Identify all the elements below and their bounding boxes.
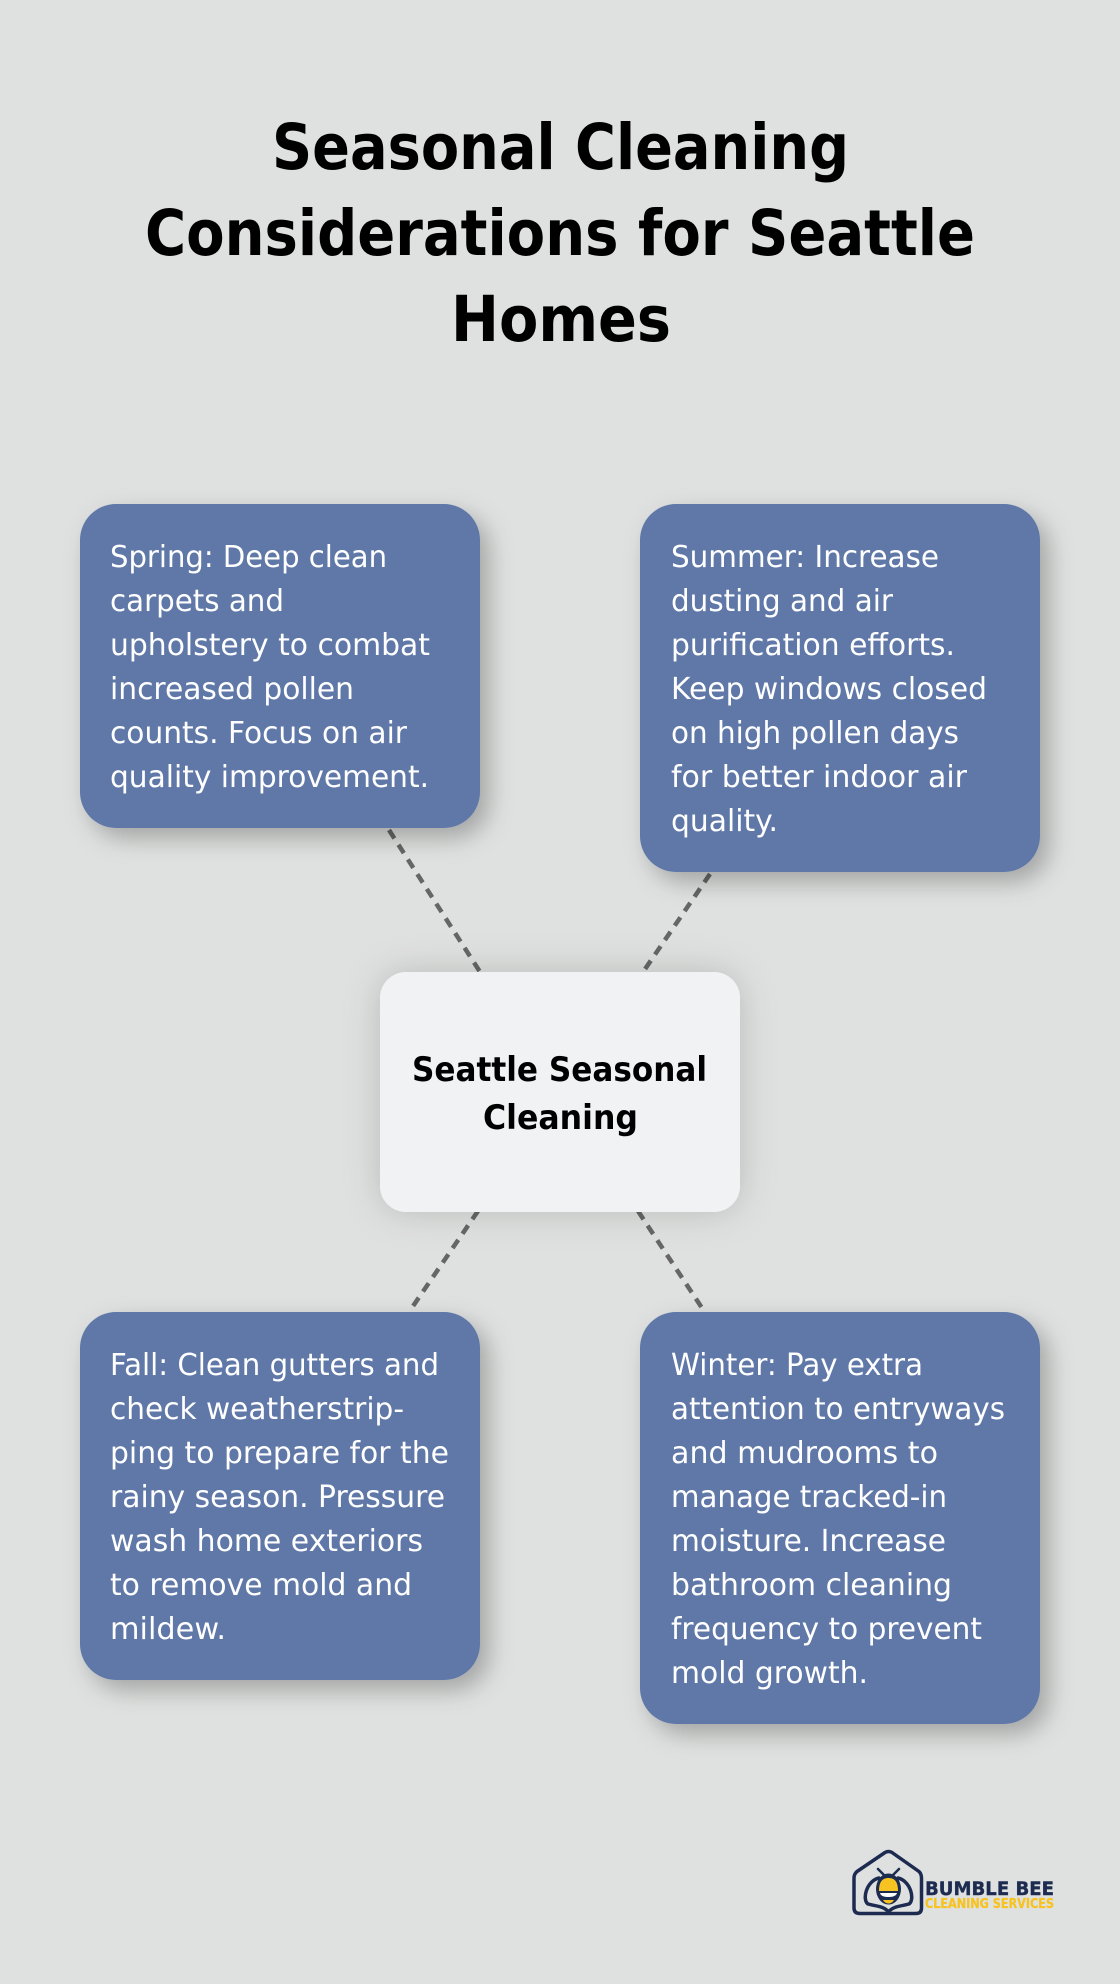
panel: spring: carpets and xyxy=(110,584,284,619)
panel: spring: upholstery to combat xyxy=(110,628,430,663)
panel: winter: Winter: Pay extra xyxy=(671,1348,923,1383)
panel: spring xyxy=(80,504,480,828)
panel: spring: increased pollen xyxy=(110,672,354,707)
title: Considerations for Seattle xyxy=(145,197,975,270)
connector: summer to center xyxy=(641,874,710,975)
panel: winter: mold growth. xyxy=(671,1656,868,1691)
panel: fall: Fall: Clean gutters and xyxy=(110,1348,439,1383)
panel: summer: quality. xyxy=(671,804,778,839)
title: Homes xyxy=(451,283,671,356)
panel: fall xyxy=(80,1312,480,1680)
panel: center hub: Cleaning xyxy=(483,1098,638,1138)
panel: fall: check weatherstrip- xyxy=(110,1392,404,1427)
panel: fall: mildew. xyxy=(110,1612,226,1647)
panel: summer: Keep windows closed xyxy=(671,672,987,707)
logo: Bumble Bee Cleaning Services xyxy=(854,1852,1054,1914)
panel: summer: Summer: Increase xyxy=(671,540,939,575)
panel: spring: counts. Focus on air xyxy=(110,716,408,751)
panel: summer: on high pollen days xyxy=(671,716,959,751)
connector: spring to center xyxy=(389,830,482,975)
panel: spring: Spring: Deep clean xyxy=(110,540,387,575)
logo wordmark: BUMBLE BEE xyxy=(925,1878,1054,1900)
panel: summer: dusting and air xyxy=(671,584,894,619)
panel: fall: ping to prepare for the xyxy=(110,1436,449,1471)
panel: summer: purification efforts. xyxy=(671,628,955,663)
panel: winter: attention to entryways xyxy=(671,1392,1005,1427)
title xyxy=(145,111,975,356)
title: Seasonal Cleaning xyxy=(272,111,849,184)
panel: fall: to remove mold and xyxy=(110,1568,412,1603)
connector: fall to center xyxy=(409,1211,478,1312)
connector: winter to center xyxy=(638,1211,706,1314)
panel: fall: rainy season. Pressure xyxy=(110,1480,445,1515)
panel: winter: and mudrooms to xyxy=(671,1436,938,1471)
panel: winter: moisture. Increase xyxy=(671,1524,946,1559)
panel: winter: manage tracked-in xyxy=(671,1480,947,1515)
panel: center hub xyxy=(380,972,740,1212)
panel: fall: wash home exteriors xyxy=(110,1524,423,1559)
panel: center hub: Seattle Seasonal xyxy=(412,1050,707,1090)
icon: bee in house xyxy=(854,1852,922,1914)
panel: winter: frequency to prevent xyxy=(671,1612,982,1647)
panel: summer: for better indoor air xyxy=(671,760,968,795)
panel: spring: quality improvement. xyxy=(110,760,429,795)
panel: winter xyxy=(640,1312,1040,1724)
logo tagline: CLEANING SERVICES xyxy=(925,1897,1054,1912)
panel: summer xyxy=(640,504,1040,872)
panel: winter: bathroom cleaning xyxy=(671,1568,952,1603)
